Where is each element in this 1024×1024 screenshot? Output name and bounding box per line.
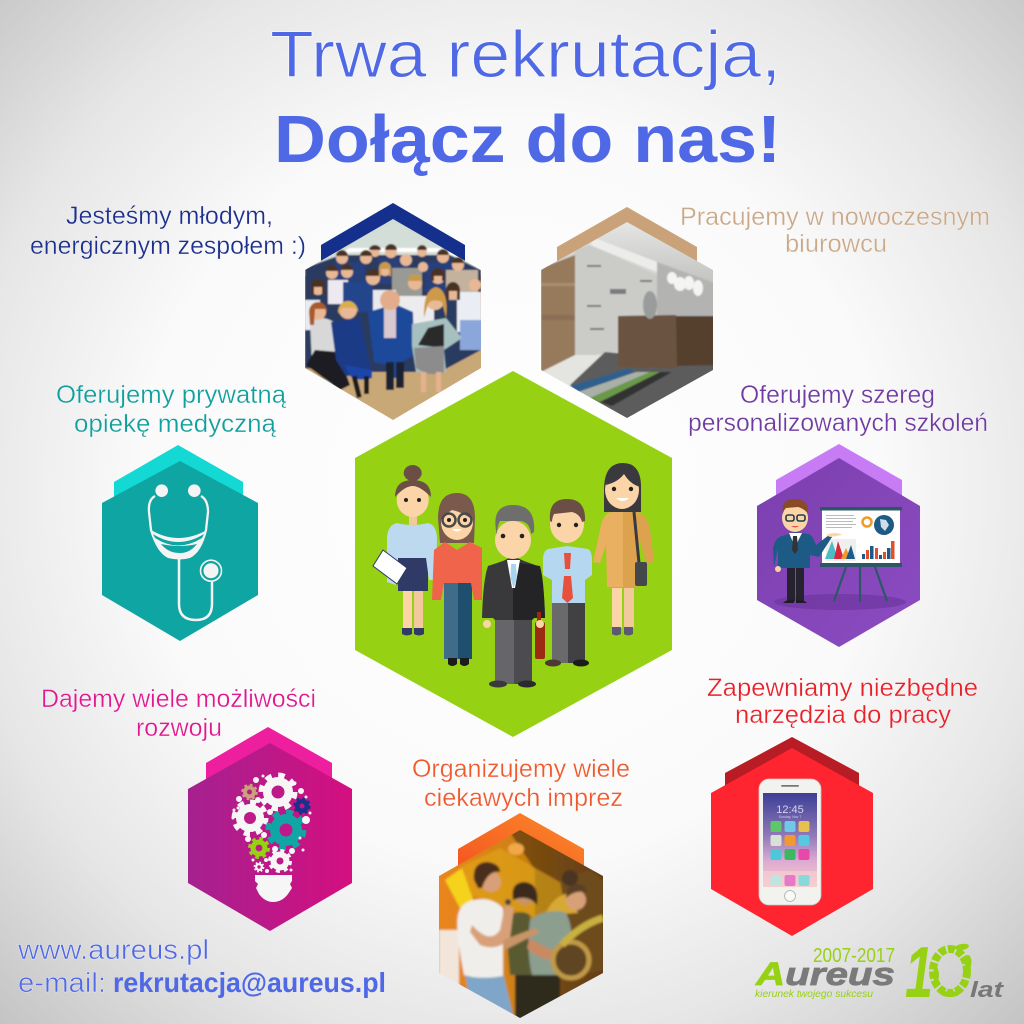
logo: Aureus 10 lat: kierunek twojego sukcesu xyxy=(755,988,873,1000)
logo: Aureus 10 lat: lat xyxy=(970,977,1005,1002)
icon: smartphone: 12:45 xyxy=(776,804,804,816)
icon: presenter xyxy=(773,499,842,603)
front woman in light jacket xyxy=(412,287,462,392)
team heads back rows xyxy=(311,246,481,299)
logo: Aureus 10 lat: 2007-2017 xyxy=(813,945,895,967)
panel: medical hexagon xyxy=(102,445,258,641)
caption: team xyxy=(30,202,306,260)
panel: tools hexagon xyxy=(711,737,873,936)
caption: office xyxy=(680,203,990,258)
caption: development: Dajemy wiele możliwości xyxy=(41,685,316,713)
caption: medical care: opiekę medyczną xyxy=(74,410,276,438)
panel: events photo hexagon xyxy=(435,813,607,1020)
title: Trwa rekrutacja, xyxy=(270,17,781,91)
icon: smartphone: Sunday, Nov 7 xyxy=(779,815,801,819)
caption: office: Pracujemy w nowoczesnym xyxy=(680,203,990,231)
contact details xyxy=(17,934,386,998)
caption: tools: narzędzia do pracy xyxy=(735,701,952,729)
panel: development hexagon xyxy=(188,727,352,931)
panel: team photo hexagon xyxy=(300,203,490,425)
icon: laurel wreath zero xyxy=(933,943,972,997)
singer with microphone xyxy=(457,862,540,1015)
caption: medical care: Oferujemy prywatną xyxy=(56,381,286,409)
icon: stethoscope xyxy=(149,484,222,620)
panel: training hexagon xyxy=(757,444,920,647)
figure: man with briefcase xyxy=(482,505,545,688)
title xyxy=(270,17,781,177)
caption: medical care xyxy=(56,381,286,438)
caption: development: rozwoju xyxy=(136,714,222,742)
caption: events: ciekawych imprez xyxy=(424,784,623,812)
caption: tools xyxy=(707,674,978,729)
caption: office: biurowcu xyxy=(785,230,887,258)
caption: team: energicznym zespołem :) xyxy=(30,232,306,260)
caption: development xyxy=(41,685,316,742)
logo: Aureus 10 lat: Aureus xyxy=(755,956,895,992)
figure: woman with glasses xyxy=(432,493,482,666)
caption: events: Organizujemy wiele xyxy=(412,755,630,783)
caption: training: personalizowanych szkoleń xyxy=(688,409,988,437)
icon: light bulb made of gears xyxy=(232,774,312,902)
panel: central green hexagon with team figures xyxy=(355,371,672,737)
band member in the middle xyxy=(505,882,538,975)
figure: woman with clipboard xyxy=(373,465,437,636)
caption: events xyxy=(412,755,630,812)
panel: office photo hexagon xyxy=(541,207,713,418)
logo: Aureus 10 lat: 1 xyxy=(905,933,933,1013)
front woman in blue suit xyxy=(331,301,372,398)
contact details: rekrutacja@aureus.pl xyxy=(113,967,386,998)
title: Dołącz do nas! xyxy=(274,102,781,177)
logo: Aureus 10 lat xyxy=(755,933,1005,1013)
caption: training xyxy=(688,381,988,437)
front man in blue suit xyxy=(368,290,414,390)
caption: tools: Zapewniamy niezbędne xyxy=(707,674,978,702)
shadow xyxy=(774,594,906,610)
band member with horn xyxy=(515,884,603,1020)
figure: woman with shoulder bag xyxy=(593,463,654,636)
caption: team: Jesteśmy młodym, xyxy=(66,202,273,230)
contact details: www.aureus.pl xyxy=(17,934,209,965)
caption: training: Oferujemy szereg xyxy=(740,381,935,409)
contact details: e-mail: xyxy=(18,967,106,998)
icon: presentation board xyxy=(820,507,902,602)
front-left woman with red hair xyxy=(306,302,350,390)
figure: man with red tie xyxy=(543,499,592,666)
icon: smartphone xyxy=(759,779,821,905)
